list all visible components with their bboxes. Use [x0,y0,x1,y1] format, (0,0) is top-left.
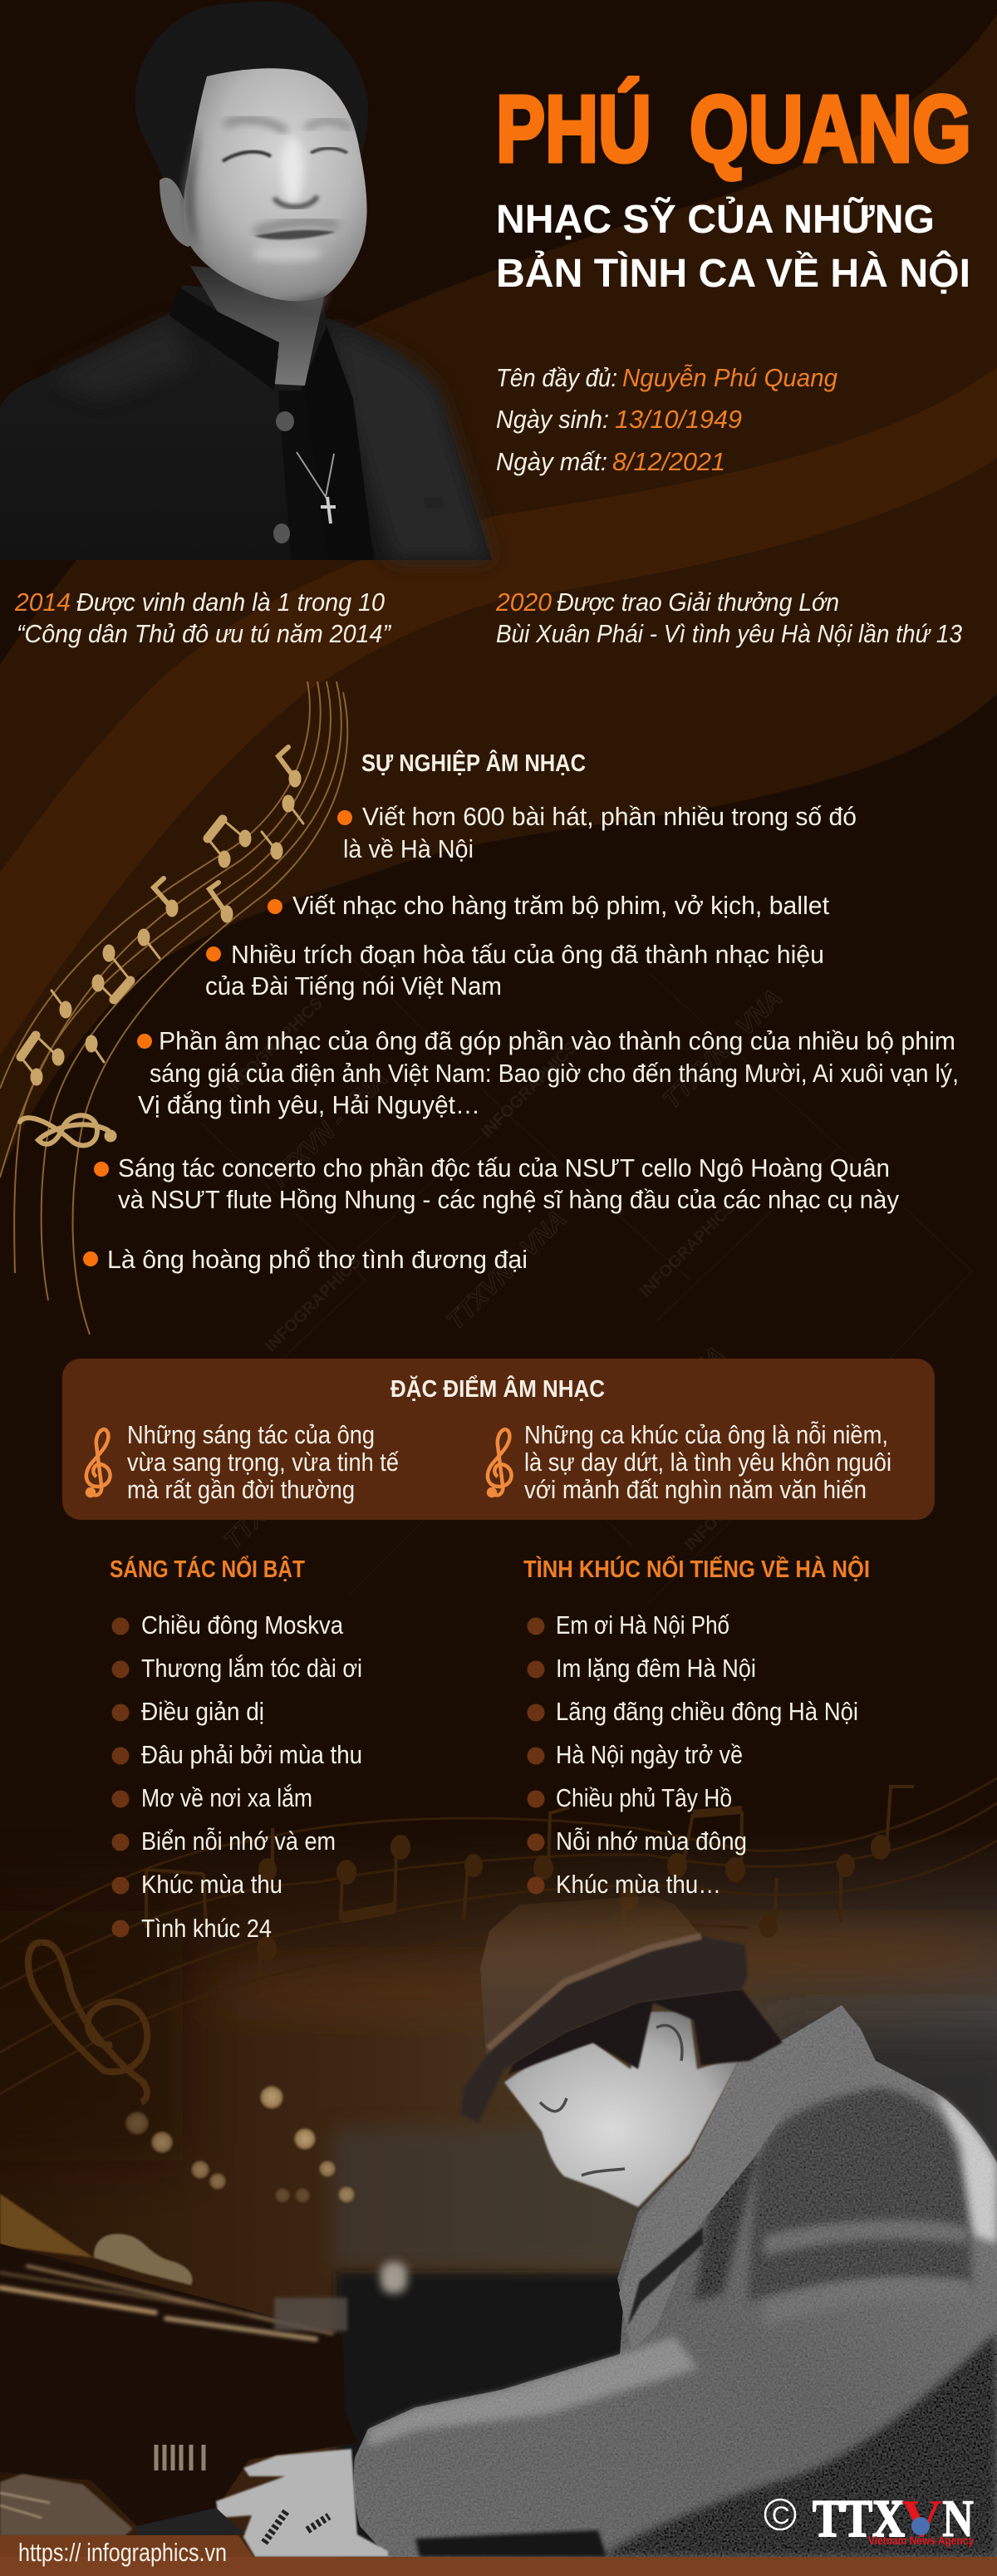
pianist: right hand [216,2449,388,2557]
pianist: hair [508,1989,783,2074]
list: notable works: Thương lắm tóc dài ơi [141,1654,362,1683]
career bullet list: là về Hà Nội [343,834,474,863]
portrait: ear [160,178,193,247]
characteristic text left: Những sáng tác của ông [127,1420,375,1449]
pianist: hat [460,1895,748,2123]
copyright logo TTXVN: C [772,2502,790,2529]
big faint treble clef [28,1943,147,2102]
career bullet list: và NSƯT flute Hồng Nhung - các nghệ sĩ hàng đầu của các nhạc cụ này [118,1185,899,1214]
list: love songs about Hanoi: Em ơi Hà Nội Phố [556,1610,729,1639]
panel: musical characteristics [62,1359,935,1520]
watermarks: TTXVN - VNA [263,1064,393,1195]
list: love songs about Hanoi: Khúc mùa thu… [556,1870,721,1899]
piano: body [0,2244,357,2526]
copyright logo TTXVN: TTX [813,2490,905,2548]
career bullet list [83,802,959,1274]
portrait: face [184,68,367,301]
portrait: collar [169,287,279,391]
career bullet list: Sáng tác concerto cho phần độc tấu của NSƯT cello Ngô Hoàng Quân [118,1153,890,1182]
icon: treble clef left [86,1429,111,1496]
bokeh lights [125,2086,407,2293]
portrait photo of Phú Quang [0,2,492,560]
portrait: facial features [184,120,351,309]
list: notable works [111,1610,362,1943]
heading: music career: SỰ NGHIỆP ÂM NHẠC [361,749,586,777]
career bullet list: Nhiều trích đoạn hòa tấu của ông đã thành nhạc hiệu [231,940,824,969]
subtitle [496,196,970,296]
list: notable works: Khúc mùa thu [141,1870,282,1899]
piano [0,2194,357,2526]
watermarks: INFOGRAPHICS [223,995,327,1098]
list: notable works: Mơ về nơi xa lắm [141,1783,312,1812]
biography details: 8/12/2021 [612,447,725,476]
watermarks [199,939,972,1604]
career bullet list: của Đài Tiếng nói Việt Nam [205,971,502,1000]
panel heading: ĐẶC ĐIỂM ÂM NHẠC [390,1374,605,1403]
biography details: Nguyễn Phú Quang [622,363,837,392]
career bullet list: Vị đắng tình yêu, Hải Nguyệt… [138,1090,480,1119]
watermarks: TTXVN - VNA [658,984,788,1114]
title [496,76,971,181]
list heading: notable works: SÁNG TÁC NỔI BẬT [110,1555,305,1583]
characteristic text left: mà rất gần đời thường [127,1475,355,1504]
pianist: coat folds [368,2087,997,2557]
award 2020: Được trao Giải thưởng Lớn [557,587,839,617]
list: love songs about Hanoi: Nỗi nhớ mùa đông [556,1826,747,1856]
copyright logo TTXVN: V [901,2490,942,2548]
biography details: 13/10/1949 [615,405,742,434]
list heading: love songs about Hanoi: TÌNH KHÚC NỔI TIẾNG VỀ HÀ NỘI [523,1555,870,1583]
list: love songs about Hanoi: Im lặng đêm Hà Nội [556,1654,756,1683]
watermarks: INFOGRAPHICS [478,1039,581,1142]
watermarks: TTXVN - VNA [442,1205,572,1335]
pianist [0,1895,997,2557]
list: notable works: Chiều đông Moskva [141,1610,344,1639]
biography details: Ngày mất: [496,447,607,476]
list: love songs about Hanoi: Chiều phủ Tây Hồ [556,1783,732,1812]
copyright logo TTXVN: Vietnam News Agency [868,2534,974,2547]
award 2020: 2020 [495,587,552,617]
footer url: https:// infographics.vn [18,2538,227,2567]
list: notable works: Điều giản dị [141,1697,264,1726]
award 2020 [495,587,962,648]
characteristic text right: với mảnh đất nghìn năm văn hiến [524,1475,867,1504]
watermarks: INFOGRAPHICS [681,1452,784,1555]
portrait: neck [190,266,328,386]
bottom photo background [0,1812,997,2564]
pianist: left hand [0,2474,133,2536]
subtitle: NHẠC SỸ CỦA NHỮNG [496,196,935,242]
award 2014: Được vinh danh là 1 trong 10 [76,587,385,617]
biography details: Tên đầy đủ: [496,363,617,392]
piano: brand mark [156,2445,204,2470]
watermarks: INFOGRAPHICS [636,1198,739,1301]
list: notable works: Biển nỗi nhớ và em [141,1826,336,1856]
subtitle: BẢN TÌNH CA VỀ HÀ NỘI [496,250,970,296]
pianist: collar [619,2005,876,2352]
watermarks: INFOGRAPHICS [262,1253,365,1356]
characteristic text right: là sự day dứt, là tình yêu khôn nguôi [524,1448,891,1477]
portrait: buttons and necklace [273,411,444,543]
faint music staff and notes [0,1778,997,2102]
copyright logo TTXVN [765,2490,974,2548]
career bullet list: Viết nhạc cho hàng trăm bộ phim, vở kịch, ballet [292,891,829,920]
watermarks: TTXVN - VNA [219,1424,349,1555]
list: notable works: Đâu phải bởi mùa thu [141,1740,362,1769]
pianist: coat [354,2005,997,2557]
characteristic text right [524,1420,891,1504]
career bullet list: Viết hơn 600 bài hát, phần nhiều trong số đó [362,802,857,831]
career bullet list: Phần âm nhạc của ông đã góp phần vào thành công của nhiều bộ phim [159,1026,955,1055]
footer bar [0,2535,997,2576]
list: notable works: Tình khúc 24 [141,1914,272,1943]
biography details [496,363,837,476]
characteristic text right: Những ca khúc của ông là nỗi niềm, [524,1420,888,1449]
pianist: face [504,2012,742,2207]
biography details: Ngày sinh: [496,405,609,434]
music staff decoration [0,681,347,1335]
piano: ornament on top [94,2234,193,2285]
icon: treble clef right [488,1429,512,1496]
pianist: eye, ear and mouth [540,2025,682,2175]
list: love songs about Hanoi: Hà Nội ngày trở về [556,1740,743,1769]
career bullet list: Là ông hoàng phổ thơ tình đương đại [107,1245,528,1274]
piano: lid highlights [0,2266,332,2339]
characteristic text left: vừa sang trọng, vừa tinh tế [127,1448,399,1477]
award 2014: “Công dân Thủ đô ưu tú năm 2014” [17,619,392,648]
watermarks: TTXVN - VNA [601,1341,730,1472]
copyright logo TTXVN: N [942,2490,974,2548]
characteristic text left [127,1420,399,1504]
list: love songs about Hanoi [527,1610,858,1899]
award 2014: 2014 [14,587,71,617]
list: love songs about Hanoi: Lãng đãng chiều đông Hà Nội [556,1697,858,1726]
award 2014 [14,587,392,648]
portrait: hair [135,2,368,204]
title: PHÚ [496,76,651,181]
piano keys [264,2510,329,2543]
watermarks: INFOGRAPHICS [408,1418,511,1522]
